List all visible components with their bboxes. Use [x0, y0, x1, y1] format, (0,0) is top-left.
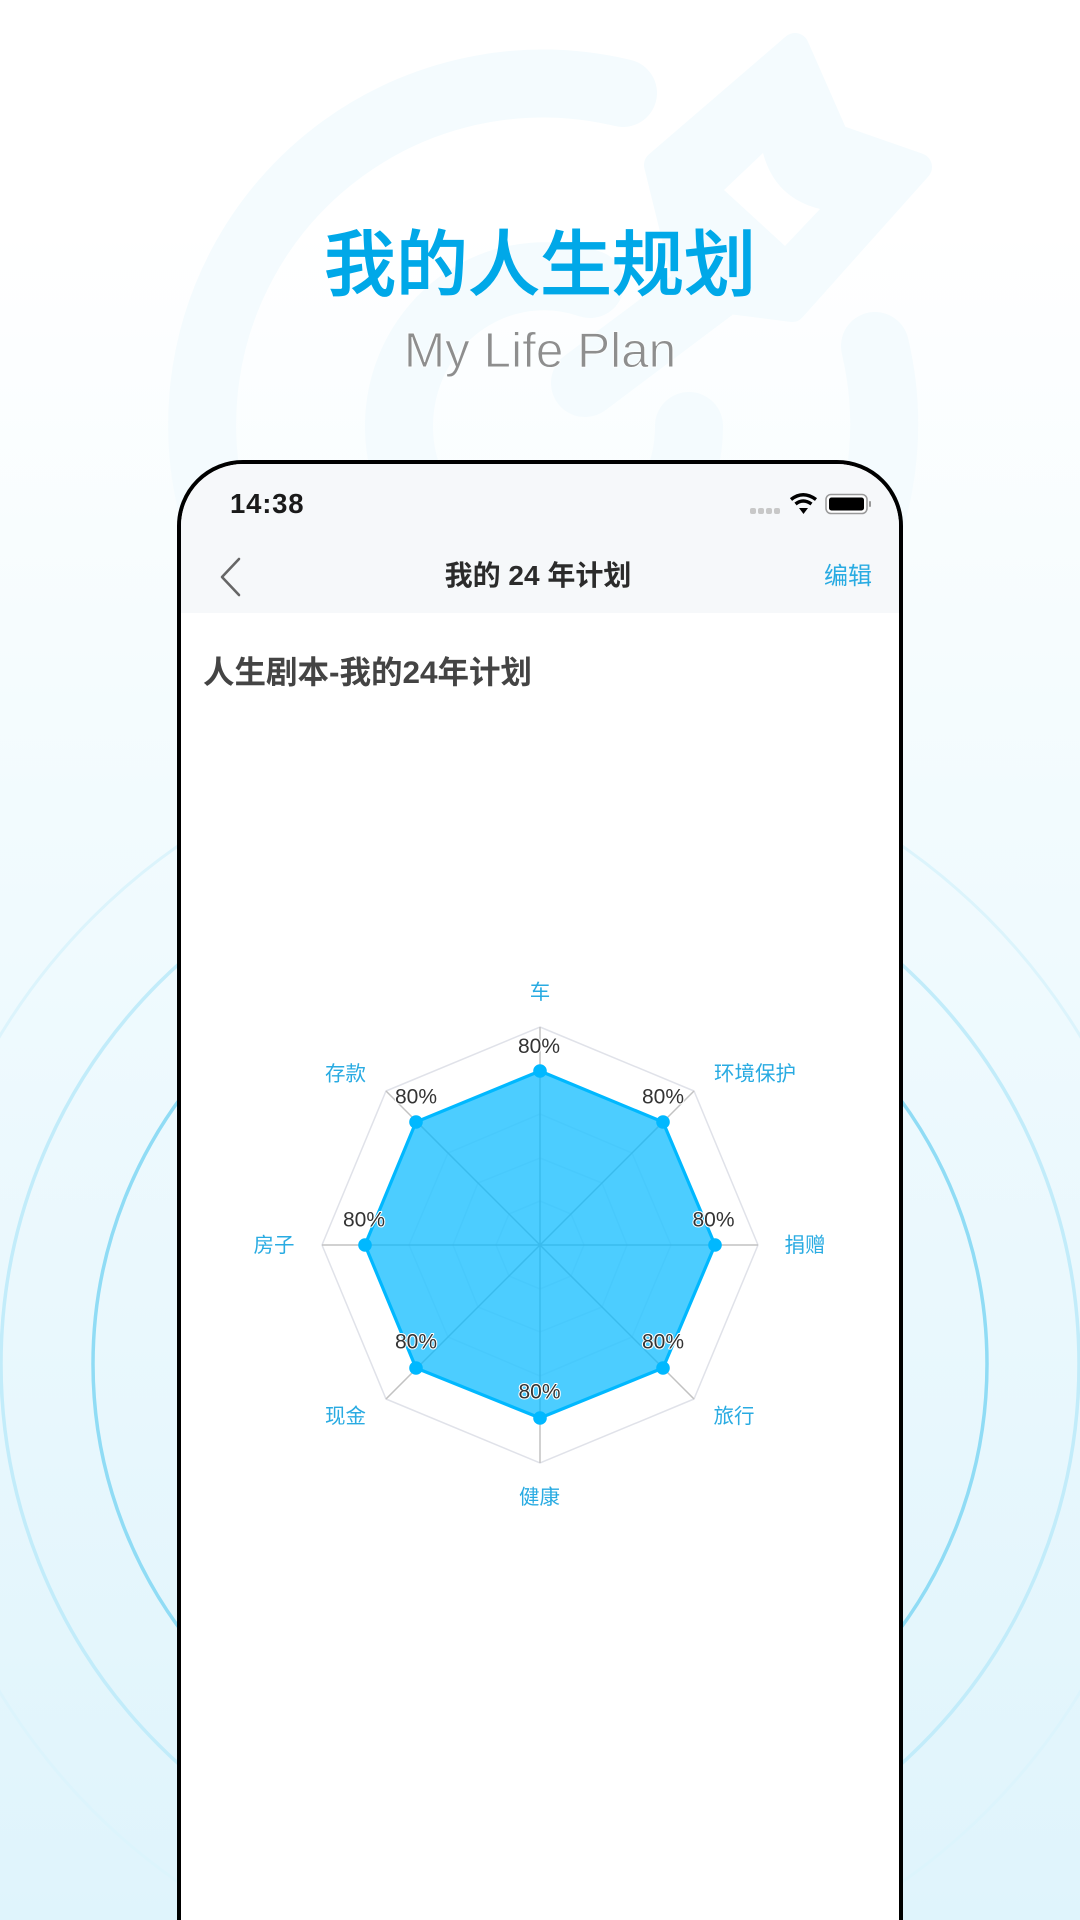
- axis labels: 现金: [325, 1405, 366, 1428]
- radar data points: [358, 1064, 722, 1425]
- value labels: 80%: [642, 1330, 684, 1354]
- value labels: 80%: [395, 1086, 437, 1108]
- axis labels: 存款: [325, 1062, 366, 1086]
- axis labels: 捐赠: [784, 1234, 826, 1257]
- status bar time: 14:38: [230, 488, 304, 519]
- subtitle: My Life Plan: [404, 323, 676, 378]
- value labels: 80%: [343, 1208, 385, 1232]
- axis labels: 旅行: [714, 1405, 754, 1428]
- value labels: 80%: [518, 1380, 561, 1404]
- value labels: 80%: [395, 1330, 437, 1354]
- value labels: 80%: [692, 1208, 735, 1232]
- panel: phone mockup: [177, 460, 903, 1920]
- back arrow icon: [220, 558, 240, 596]
- radar data area: [365, 1071, 715, 1418]
- nav title: 我的 24 年计划: [445, 560, 631, 591]
- value labels: 80%: [518, 1035, 560, 1058]
- axis labels: 房子: [254, 1234, 294, 1257]
- value labels: 80%: [642, 1086, 684, 1108]
- value labels: [343, 1035, 735, 1404]
- status bar icons: [750, 493, 871, 514]
- axis labels: 环境保护: [714, 1062, 796, 1086]
- axis labels: [254, 981, 826, 1509]
- panel: app header bar: [181, 464, 899, 613]
- section heading: 人生剧本-我的24年计划: [203, 654, 532, 690]
- axis labels: 车: [530, 981, 550, 1004]
- axis labels: 健康: [519, 1486, 560, 1509]
- radar grid: [322, 1027, 758, 1463]
- title: 我的人生规划: [324, 226, 756, 306]
- edit button: 编辑: [824, 563, 872, 590]
